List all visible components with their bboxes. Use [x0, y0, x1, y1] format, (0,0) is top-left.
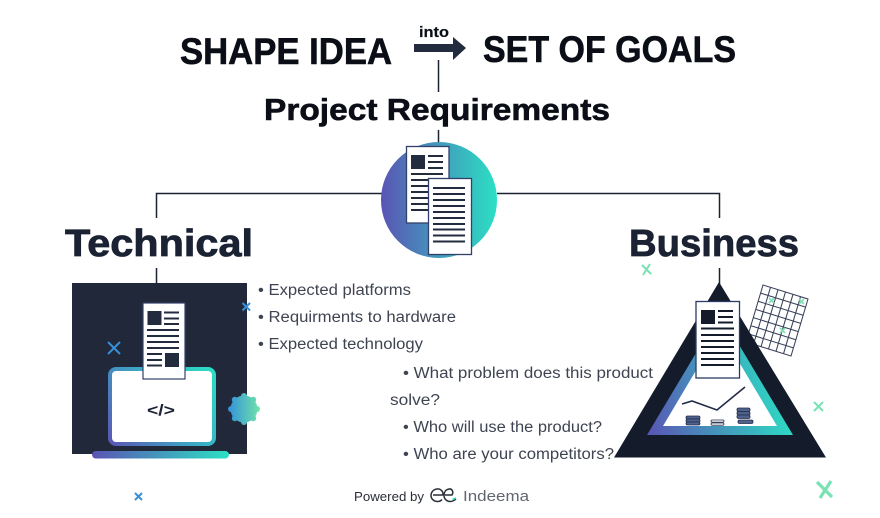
- text: business requirements: • Who are your competitors?: [403, 446, 614, 463]
- text: technical requirements: [258, 282, 456, 353]
- text: business requirements: [390, 365, 654, 463]
- text: business requirements: • Who will use the product?: [403, 419, 602, 436]
- connector lines: [156, 60, 720, 290]
- icon: calendar grid: [746, 285, 808, 356]
- icon: coins: [686, 408, 753, 425]
- text: technical requirements: • Expected technology: [258, 336, 423, 353]
- heading: technical: Technical: [65, 223, 253, 265]
- text: business requirements: solve?: [390, 392, 440, 409]
- icon: gear: [228, 393, 260, 425]
- panel: business illustration: [614, 264, 826, 458]
- icon: blue crosses: [108, 303, 250, 500]
- icon: laptop: [92, 369, 229, 458]
- title: shape idea: SHAPE IDEA: [180, 31, 392, 72]
- text: technical requirements: • Requirments to hardware: [258, 309, 456, 326]
- panel: technical illustration: [72, 283, 260, 500]
- footer: powered by indeema: Powered by: [354, 490, 425, 504]
- text: technical requirements: • Expected platforms: [258, 282, 411, 299]
- heading: business: Business: [629, 223, 799, 265]
- icon: indeema logo: [431, 489, 456, 502]
- footer: powered by indeema: [354, 488, 530, 505]
- heading: project requirements: Project Requirements: [264, 92, 610, 127]
- text: business requirements: • What problem does this product: [403, 365, 654, 382]
- icon: document: [696, 302, 740, 378]
- icon: laptop: </>: [147, 402, 175, 420]
- icon: line chart: [682, 387, 745, 410]
- arrow: into: [414, 25, 466, 60]
- footer: powered by indeema: Indeema: [463, 488, 530, 505]
- title: set of goals: SET OF GOALS: [483, 29, 736, 70]
- icon: document: [143, 303, 185, 379]
- icon: green crosses: [642, 264, 823, 411]
- icon: layered triangle: [614, 282, 826, 458]
- arrow: into: into: [419, 25, 449, 41]
- icon: documents in gradient circle: [381, 142, 497, 258]
- icon: large green cross: [817, 481, 832, 498]
